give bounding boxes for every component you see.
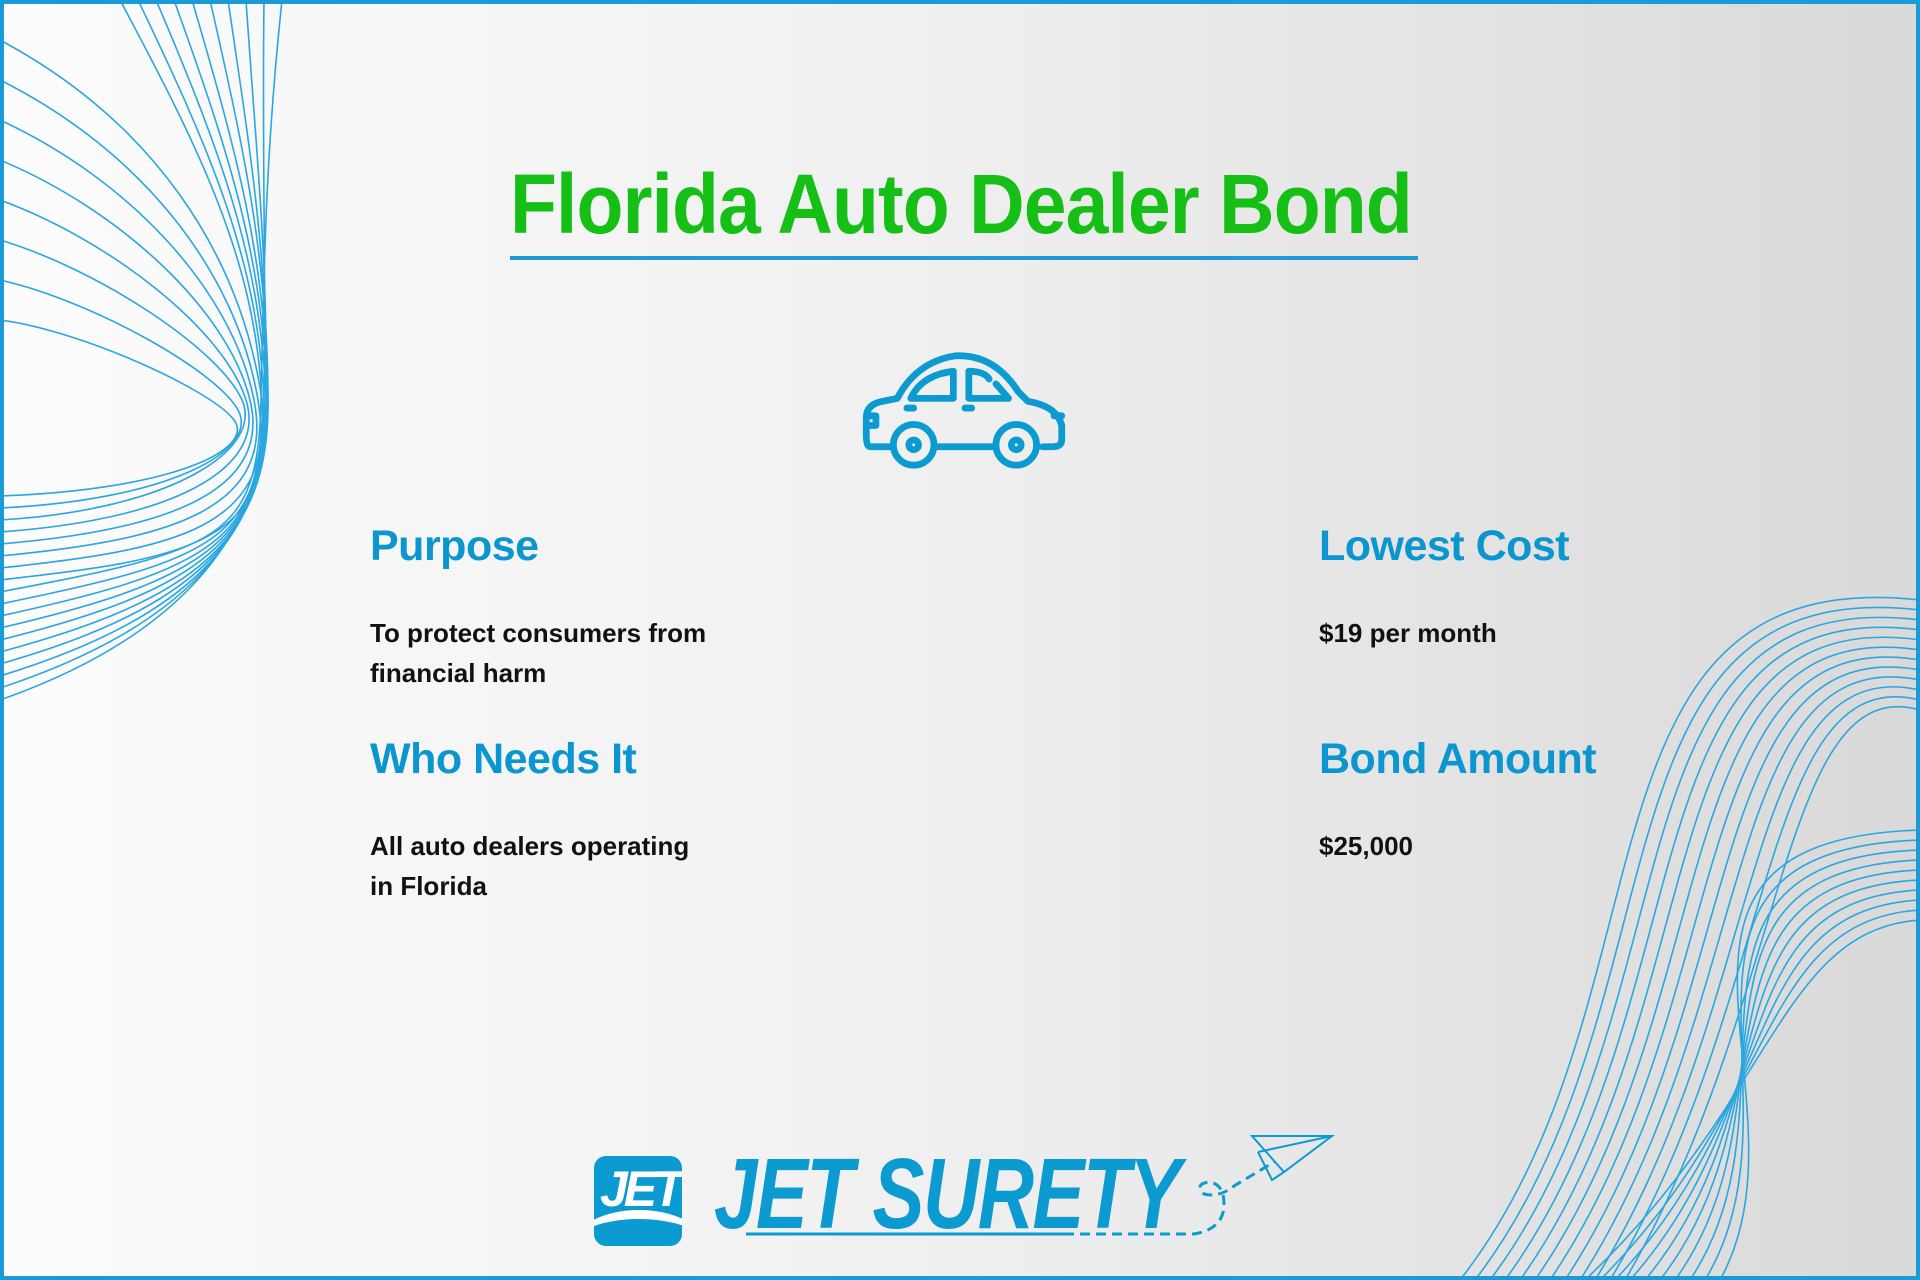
heading: lowest cost: Lowest Cost <box>1319 522 1569 570</box>
icon: jet badge <box>594 1156 682 1246</box>
logo text: JET SURETY <box>714 1138 1180 1250</box>
panel: who needs it <box>370 735 689 901</box>
heading: who needs it: Who Needs It <box>370 735 636 783</box>
text: purpose <box>370 618 706 688</box>
heading: bond amount: Bond Amount <box>1319 735 1596 783</box>
icon: paper plane <box>1252 1136 1332 1180</box>
text: who needs it: All auto dealers operating <box>370 831 689 861</box>
icon: car <box>862 352 1066 468</box>
text: bond amount: $25,000 <box>1319 831 1413 861</box>
title: Florida Auto Dealer Bond <box>510 157 1412 251</box>
underline and dashed path <box>746 1135 1335 1236</box>
text: lowest cost: $19 per month <box>1319 618 1497 648</box>
text: who needs it <box>370 831 689 901</box>
panel: lowest cost <box>1319 522 1570 648</box>
text: purpose: To protect consumers from <box>370 618 706 648</box>
panel: purpose <box>370 522 706 688</box>
icon: jet badge: JET <box>600 1161 680 1217</box>
panel: bond amount <box>1319 735 1596 861</box>
heading: purpose: Purpose <box>370 522 539 570</box>
text: purpose: financial harm <box>370 658 546 688</box>
logo: jet surety <box>594 1135 1335 1250</box>
text: who needs it: in Florida <box>370 871 487 901</box>
